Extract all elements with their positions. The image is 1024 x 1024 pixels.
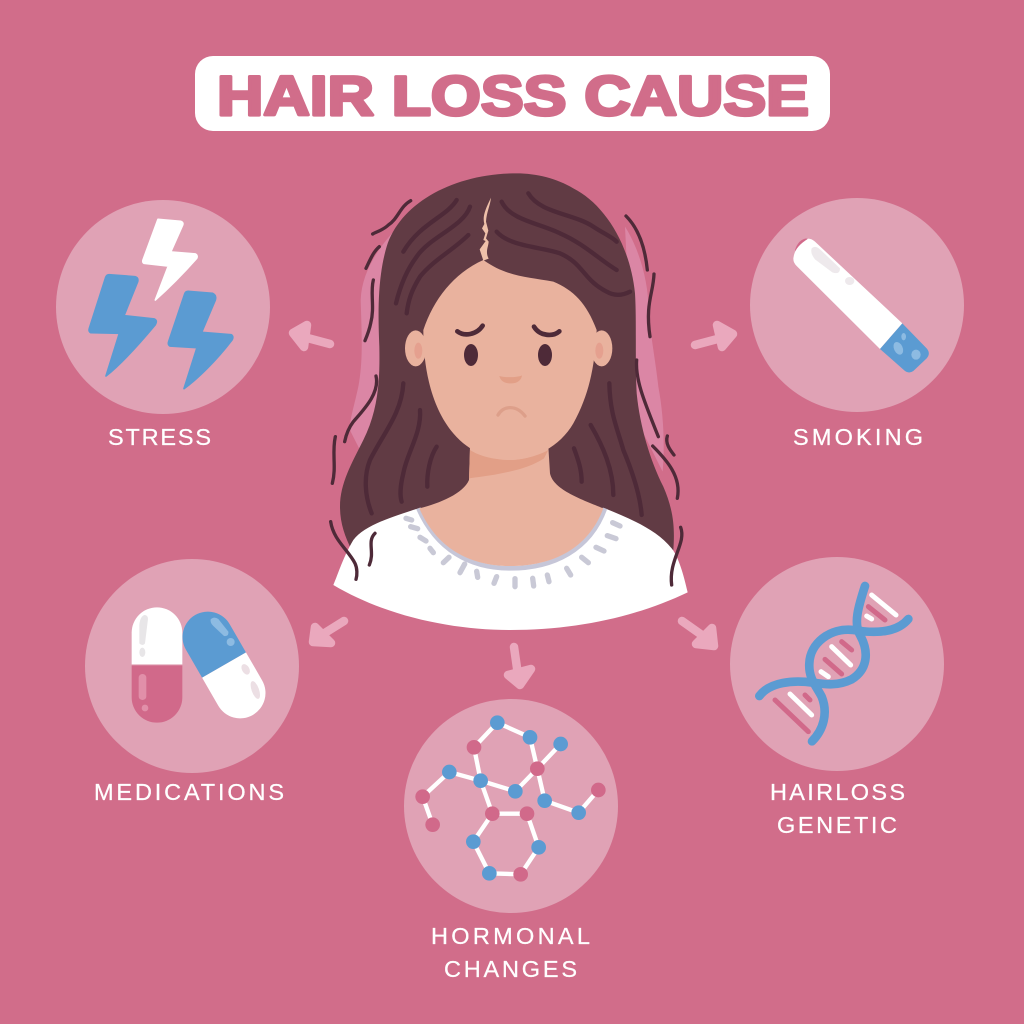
icon: DNA helix	[759, 586, 908, 741]
arrow to stress	[293, 325, 330, 347]
label: hormonal changes	[431, 923, 590, 982]
collar stitches	[406, 518, 620, 587]
eyebrows	[457, 326, 559, 335]
label: stress: STRESS	[108, 424, 211, 450]
icon: cigarette	[793, 238, 929, 372]
central figure: woman losing hair	[331, 173, 688, 630]
falling hair halo	[350, 227, 664, 472]
shirt	[333, 508, 688, 630]
icon: molecule network	[415, 715, 606, 882]
neck	[419, 447, 603, 566]
icon: lightning bolts	[89, 219, 233, 389]
mouth	[498, 408, 525, 416]
neck shadow	[469, 450, 548, 478]
title banner	[195, 56, 830, 131]
arrow to hairloss genetic	[682, 621, 714, 646]
arrow to smoking	[695, 325, 733, 347]
icon: capsules	[132, 602, 275, 728]
label: hairloss genetic	[770, 779, 905, 838]
hair parting	[480, 198, 491, 261]
panel: stress	[56, 200, 270, 450]
panel: hairloss genetic	[730, 557, 944, 838]
ears	[405, 330, 612, 366]
arrow to medications	[313, 621, 344, 643]
face	[423, 260, 597, 460]
label: hormonal changes: HORMONAL	[431, 923, 590, 949]
label: hairloss genetic: HAIRLOSS	[770, 779, 905, 805]
nose	[499, 375, 522, 383]
panel: medications	[85, 559, 299, 805]
eyes	[464, 344, 552, 366]
title banner: HAIR LOSS CAUSE	[217, 64, 809, 127]
arrow to hormonal changes	[508, 647, 531, 685]
panel: hormonal changes	[404, 699, 618, 982]
collar	[418, 508, 605, 568]
label: hormonal changes: CHANGES	[444, 956, 577, 982]
label: medications: MEDICATIONS	[94, 779, 284, 805]
hair strands	[366, 193, 642, 515]
label: hairloss genetic: GENETIC	[777, 812, 897, 838]
label: smoking: SMOKING	[793, 424, 923, 450]
hair	[340, 173, 674, 550]
panel: smoking	[750, 198, 964, 450]
stray hairs	[331, 201, 682, 585]
